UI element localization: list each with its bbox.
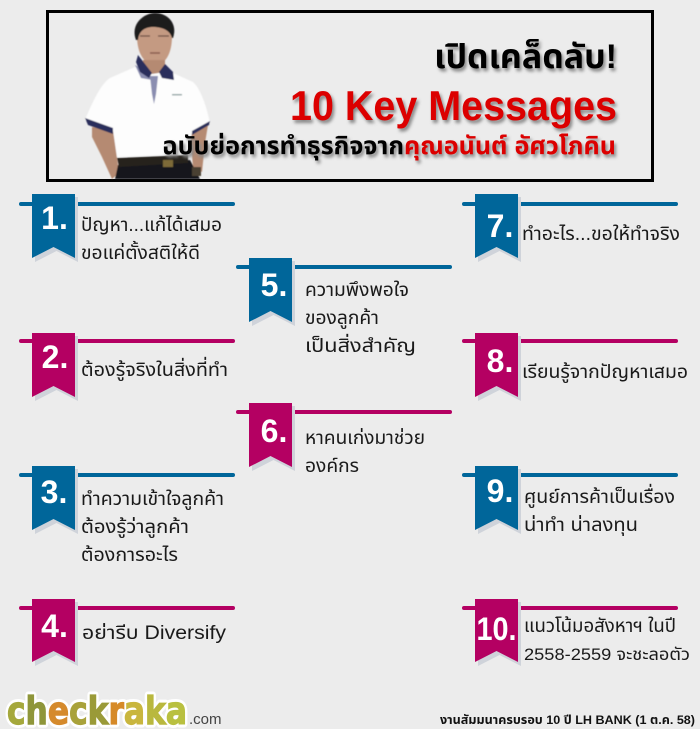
logo: checkraka.com: .com <box>189 711 222 728</box>
item 10 <box>462 599 690 666</box>
item 2: 2. <box>42 339 68 375</box>
item 5: ความพึงพอใจ <box>305 280 409 301</box>
item 6 <box>236 403 452 477</box>
item 10: แนวโน้มอสังหาฯ ในปี <box>524 614 676 637</box>
item 9: น่าทำ น่าลงทุน <box>524 513 638 536</box>
item 5: เป็นสิ่งสำคัญ <box>305 333 416 357</box>
item 5: 5. <box>261 267 287 303</box>
item 9: 9. <box>487 473 513 509</box>
item 2 <box>19 333 235 401</box>
item 6: องค์กร <box>305 456 359 477</box>
item 4: อย่ารีบ Diversify <box>82 621 227 644</box>
item 8 <box>462 333 688 401</box>
item 10: 10. <box>476 611 516 647</box>
item 4 <box>19 599 235 666</box>
item 1: ขอแค่ตั้งสติให้ดี <box>81 240 200 264</box>
item 10: 2558-2559 จะชะลอตัว <box>524 645 690 664</box>
header panel <box>48 12 652 180</box>
item 3: ต้องการอะไร <box>81 543 178 566</box>
heading line 2: 10 Key Messages <box>290 82 617 129</box>
item 1 <box>19 194 235 264</box>
item 7 <box>462 194 680 262</box>
item 3: 3. <box>41 474 67 510</box>
item 3: ต้องรู้ว่าลูกค้า <box>81 515 189 539</box>
item 3 <box>19 466 235 566</box>
heading line 3: ฉบับย่อการทำธุรกิจจากคุณอนันต์ อัศวโภคิน <box>162 132 616 161</box>
item 5: ของลูกค้า <box>305 306 379 330</box>
heading line 2: 10 Key Messages <box>292 85 619 132</box>
icon: portrait of speaker <box>85 13 210 179</box>
heading line 1: เปิดเคล็ดลับ! <box>436 41 619 79</box>
item 8: เรียนรู้จากปัญหาเสมอ <box>522 360 688 384</box>
item 7: 7. <box>487 208 513 244</box>
item 8: 8. <box>487 343 513 379</box>
item 6: 6. <box>261 413 287 449</box>
item 3: ทำความเข้าใจลูกค้า <box>81 487 224 511</box>
heading line 1: เปิดเคล็ดลับ! <box>434 38 617 76</box>
item 9: ศูนย์การค้าเป็นเรื่อง <box>524 483 675 509</box>
item 7: ทำอะไร...ขอให้ทำจริง <box>522 222 680 245</box>
item 1: ปัญหา...แก้ได้เสมอ <box>81 213 222 236</box>
item 4: 4. <box>41 608 68 644</box>
item 5 <box>236 258 452 357</box>
item 9 <box>462 466 678 536</box>
item 6: หาคนเก่งมาช่วย <box>305 426 425 449</box>
item 2: ต้องรู้จริงในสิ่งที่ทำ <box>81 356 228 382</box>
heading line 3: ฉบับย่อการทำธุรกิจจากคุณอนันต์ อัศวโภคิน <box>164 135 618 164</box>
source note: งานสัมมนาครบรอบ 10 ปี LH BANK (1 ต.ค. 58) <box>440 713 695 727</box>
item 1: 1. <box>41 200 68 236</box>
